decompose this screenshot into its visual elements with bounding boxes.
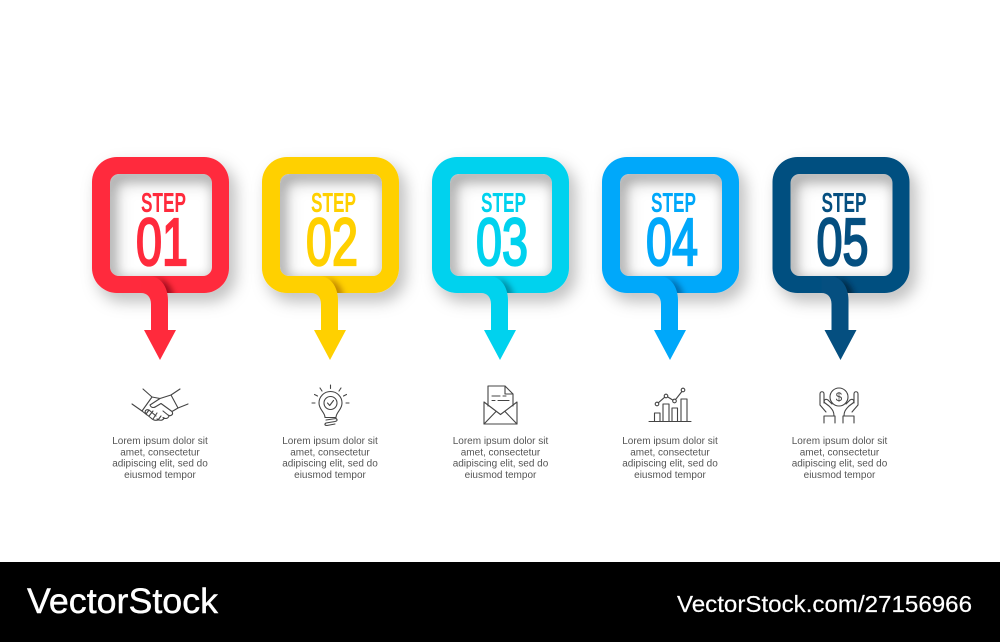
panel: step 04 [602,157,739,360]
panel: step 01 [92,157,229,360]
text block: step 02: adipiscing elit, sed do [282,459,378,470]
text block: step 04: eiusmod tempor [634,470,707,481]
panel: step 05 [772,157,910,360]
footer url: VectorStock.com/27156966 [677,591,972,617]
text block: step 03: adipiscing elit, sed do [453,459,549,470]
ring: step 04 [602,157,739,293]
text block: step 02: Lorem ipsum dolor sit [282,436,378,447]
number: 04: 04 [646,205,698,280]
icon: envelope with letter [484,386,517,424]
icon: light bulb [312,385,349,426]
number: 05: 05 [816,205,868,280]
footer brand: VectorStock [27,582,219,621]
panel: step 02 [262,157,399,360]
footer bar [0,562,1000,642]
ring: step 02 [262,157,399,293]
arrow: step 05 [822,276,856,360]
text block: step 02: amet, consectetur [290,447,370,458]
heading: step 03: STEP [481,187,526,218]
icon: hands holding coin [820,388,858,423]
text block: step 05: amet, consectetur [800,447,880,458]
ring: step 05 [772,157,910,293]
arrow: step 03 [481,276,516,360]
number: 02: 02 [306,205,358,280]
heading: step 04: STEP [651,187,696,218]
ring: step 03 [432,157,569,293]
text block: step 05: adipiscing elit, sed do [792,459,888,470]
icon: hands holding coin: $ [836,392,843,404]
text block: step 05: eiusmod tempor [804,470,876,481]
icon: handshake [132,389,188,420]
text block: step 02: eiusmod tempor [294,470,367,481]
text block: step 03: eiusmod tempor [465,470,537,481]
arrow: step 04 [651,276,686,360]
heading: step 01: STEP [141,187,186,218]
text block: step 01: adipiscing elit, sed do [112,459,208,470]
heading: step 02: STEP [311,187,356,218]
text block: step 01: amet, consectetur [120,447,200,458]
text block: step 04: Lorem ipsum dolor sit [622,436,718,447]
panel: step 03 [432,157,569,360]
text block: step 01: Lorem ipsum dolor sit [112,436,208,447]
number: 03: 03 [476,205,528,280]
ring: step 01 [92,157,229,293]
icon: bar chart with trend line [649,388,691,422]
text block: step 03: amet, consectetur [461,447,541,458]
heading: step 05: STEP [822,187,866,218]
text block: step 01: eiusmod tempor [124,470,197,481]
text block: step 05: Lorem ipsum dolor sit [792,436,888,447]
arrow: step 02 [311,276,346,360]
number: 01: 01 [136,205,188,280]
text block: step 04: amet, consectetur [630,447,710,458]
text block: step 03: Lorem ipsum dolor sit [453,436,549,447]
text block: step 04: adipiscing elit, sed do [622,459,718,470]
arrow: step 01 [141,276,176,360]
